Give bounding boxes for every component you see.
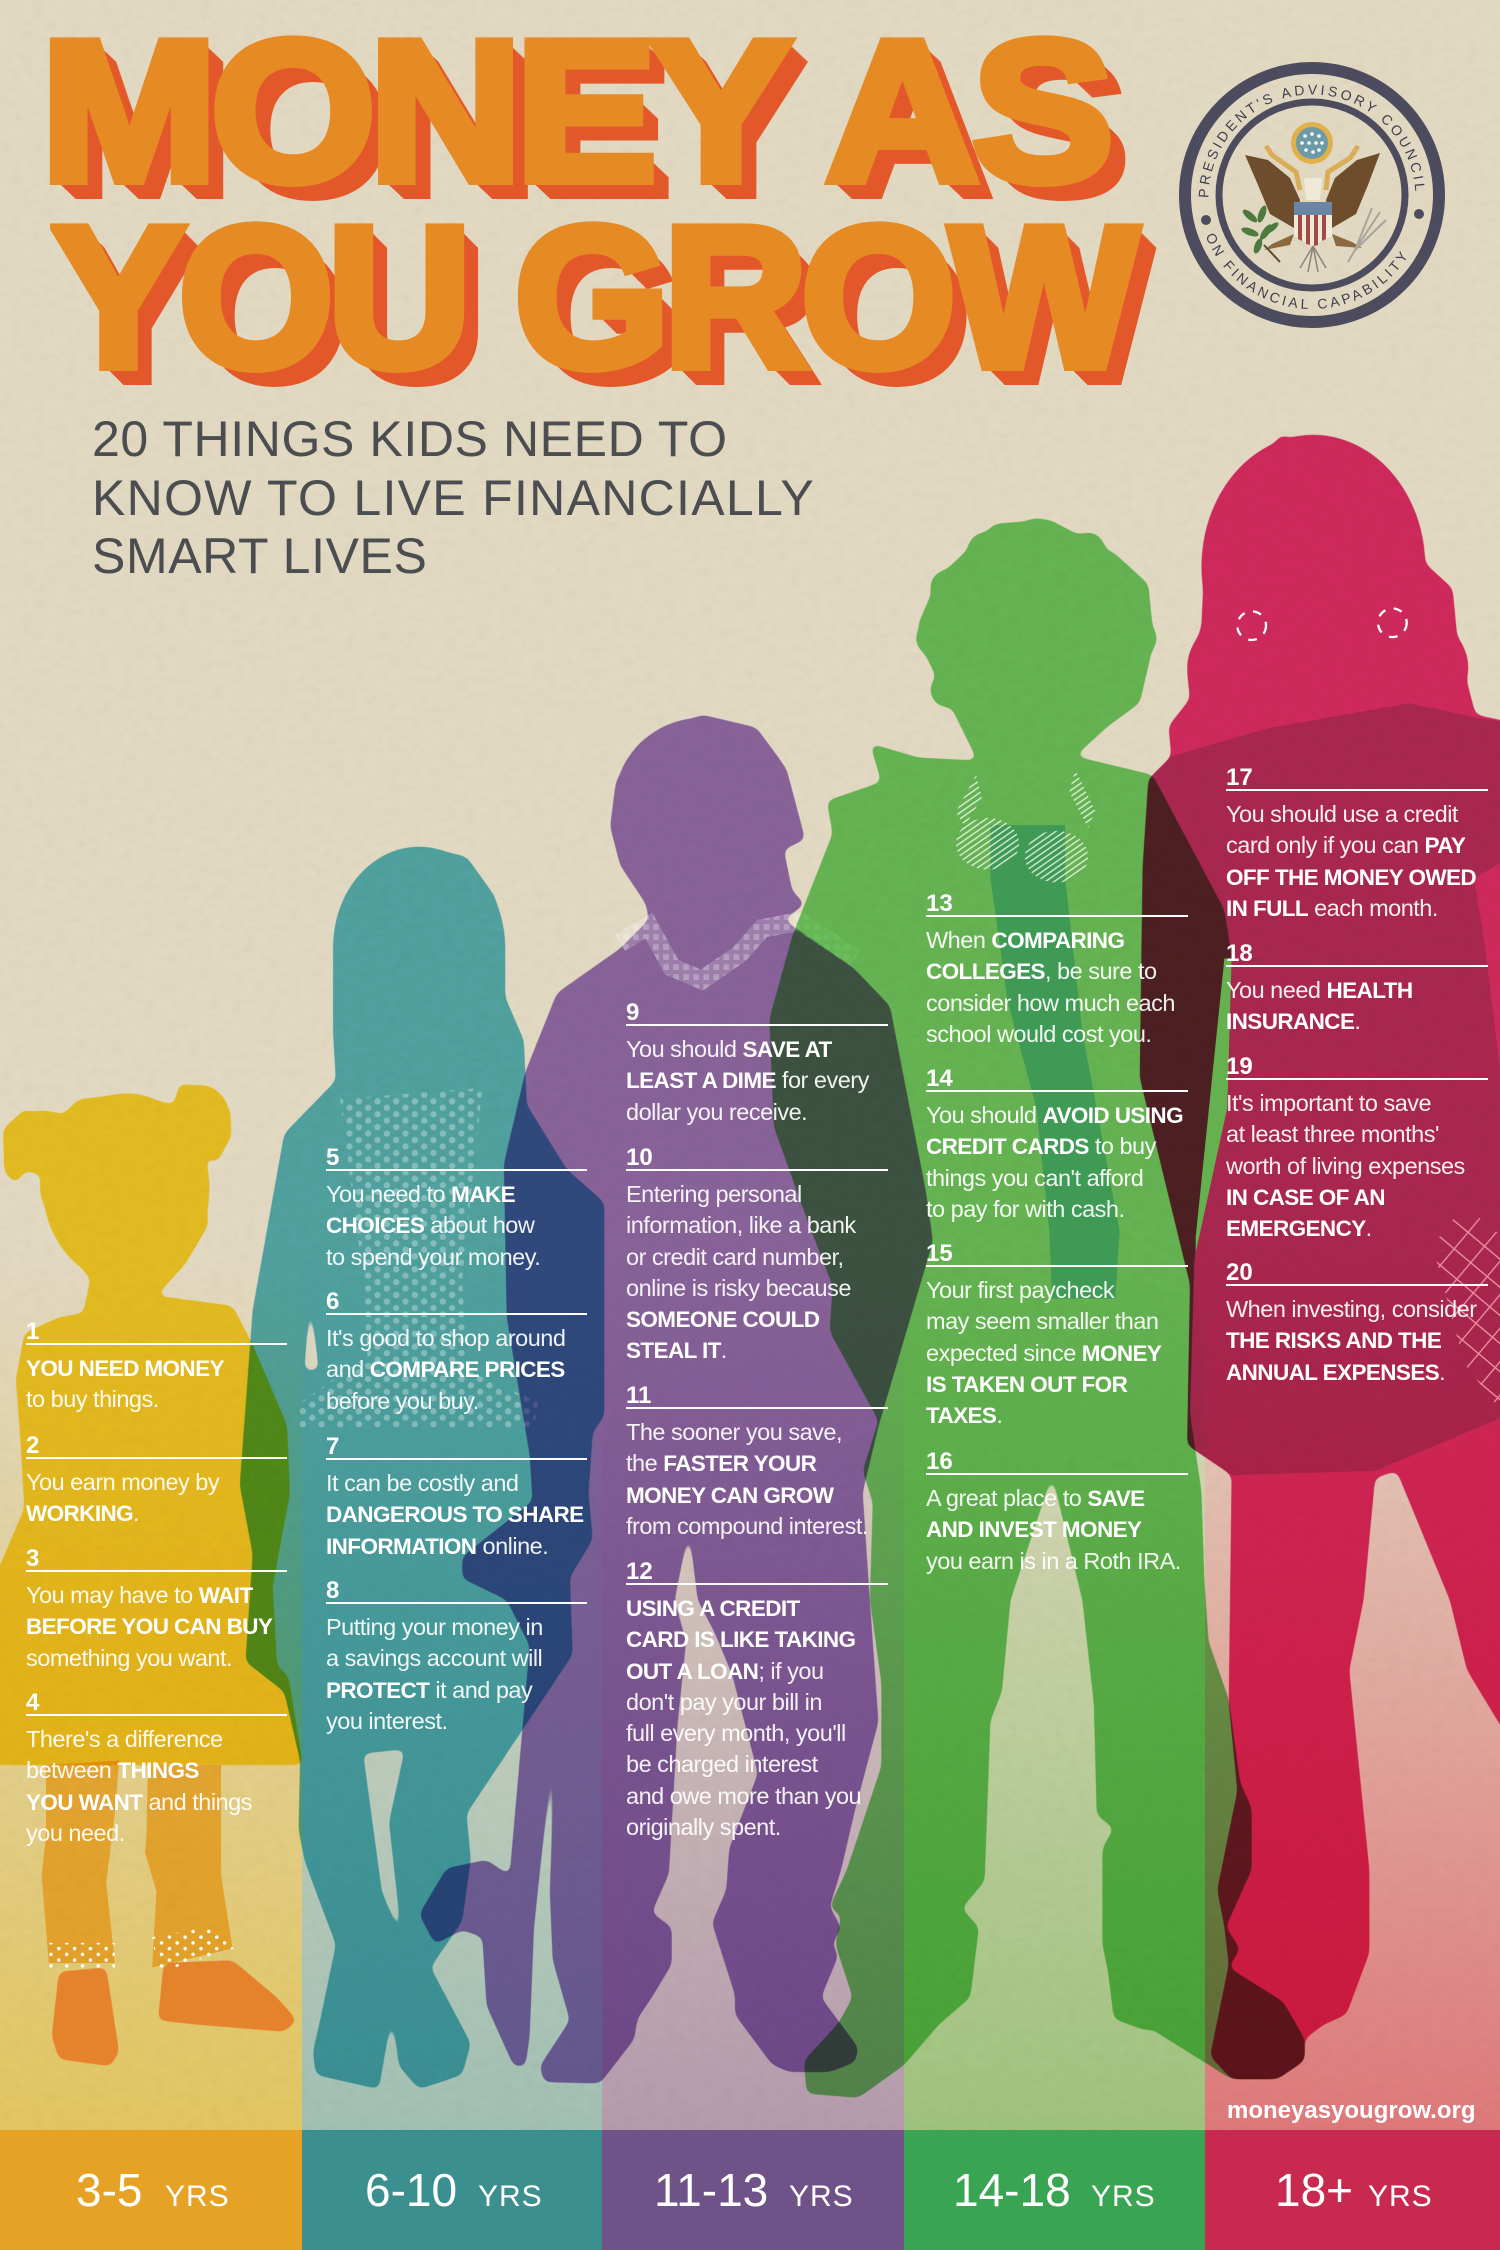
age band: 18+: 18+ — [1275, 2164, 1353, 2216]
tip 17: You should use a credit — [1226, 801, 1458, 827]
seal: President's Advisory Council on Financial Capability: PRESIDENT'S ADVISORY COUNCIL — [1198, 84, 1424, 197]
tip 3: BEFORE YOU CAN BUY — [26, 1614, 272, 1639]
tip 6 — [326, 1313, 587, 1417]
title: MONEY AS — [41, 0, 1107, 223]
tip 17: IN FULL each month. — [1226, 895, 1438, 921]
tip 13: consider how much each — [926, 990, 1175, 1016]
tip 20: When investing, consider — [1226, 1296, 1477, 1322]
items for ages 3-5: 3 — [26, 1545, 39, 1572]
subtitle: SMART LIVES — [92, 528, 427, 584]
items for ages 6-10: 8 — [326, 1577, 339, 1604]
tip 4: between THINGS — [26, 1757, 199, 1783]
tip 8 — [326, 1602, 587, 1737]
tip 17: OFF THE MONEY OWED — [1226, 865, 1476, 890]
items for ages 14-18: 16 — [926, 1448, 953, 1475]
tip 19: at least three months' — [1226, 1121, 1439, 1147]
tip 7: It can be costly and — [326, 1470, 518, 1496]
tip 10 — [626, 1169, 888, 1367]
tip 20: THE RISKS AND THE — [1226, 1328, 1441, 1353]
tip 8: a savings account will — [326, 1645, 542, 1671]
tip 20: ANNUAL EXPENSES. — [1226, 1359, 1445, 1385]
tip 19: EMERGENCY. — [1226, 1215, 1372, 1241]
tip 15: IS TAKEN OUT FOR — [926, 1372, 1127, 1397]
tip 17 — [1226, 789, 1488, 924]
items for ages 18+: 18 — [1226, 940, 1253, 967]
collar check pattern — [620, 921, 856, 980]
tip 9: You should SAVE AT — [626, 1036, 832, 1062]
tip 6: It's good to shop around — [326, 1325, 565, 1351]
subtitle: KNOW TO LIVE FINANCIALLY — [92, 470, 815, 526]
tip 3: You may have to WAIT — [26, 1582, 253, 1608]
items for ages 14-18: 13 — [926, 890, 953, 917]
tip 13: When COMPARING — [926, 927, 1124, 953]
tip 16: AND INVEST MONEY — [926, 1517, 1141, 1542]
tip 10: STEAL IT. — [626, 1337, 727, 1363]
tip 15 — [926, 1265, 1188, 1431]
tip 5: You need to MAKE — [326, 1181, 515, 1207]
age band: 14-18 — [904, 2130, 1205, 2250]
tip 14 — [926, 1090, 1188, 1225]
age band: 14-18: YRS — [1091, 2180, 1156, 2213]
title: YOU GROW — [52, 186, 1132, 409]
items for ages 18+: 20 — [1226, 1259, 1253, 1286]
legs of age 3-5 girl — [42, 1761, 233, 1967]
tip 12 — [626, 1583, 888, 1843]
items for ages 11-13: 11 — [626, 1382, 651, 1409]
age band: 3-5: YRS — [165, 2180, 230, 2213]
tip 15: Your first paycheck — [926, 1277, 1114, 1303]
tip 10: Entering personal — [626, 1181, 802, 1207]
tip 12: don't pay your bill in — [626, 1689, 822, 1715]
silhouette: age 6-10 girl — [240, 847, 604, 2089]
items for ages 14-18 — [926, 890, 1188, 1574]
tip 1: YOU NEED MONEY — [26, 1356, 224, 1381]
tip 12: CARD IS LIKE TAKING — [626, 1627, 855, 1652]
gap between arm and dress — [1196, 959, 1232, 1253]
eagle — [1240, 122, 1386, 272]
tip 19 — [1226, 1078, 1488, 1244]
tip 4: you need. — [26, 1820, 125, 1846]
tip 12: USING A CREDIT — [626, 1596, 800, 1621]
tip 14: CREDIT CARDS to buy — [926, 1133, 1156, 1159]
items for ages 18+: 19 — [1226, 1053, 1253, 1080]
items for ages 14-18: 15 — [926, 1240, 953, 1267]
tip 13 — [926, 915, 1188, 1050]
tip 18: You need HEALTH — [1226, 977, 1412, 1003]
items for ages 11-13: 12 — [626, 1558, 653, 1585]
tip 11: from compound interest. — [626, 1513, 868, 1539]
tip 5 — [326, 1169, 587, 1273]
tip 13: COLLEGES, be sure to — [926, 958, 1157, 984]
tip 15: may seem smaller than — [926, 1308, 1158, 1334]
tip 2: You earn money by — [26, 1469, 219, 1495]
tip 7 — [326, 1458, 587, 1562]
tip 3: something you want. — [26, 1645, 232, 1671]
items for ages 3-5: 4 — [26, 1689, 39, 1716]
age band: 14-18: 14-18 — [953, 2164, 1071, 2216]
woman's dress — [1140, 703, 1500, 1475]
shoes of age 3-5 girl — [52, 1960, 297, 2066]
tip 1 — [26, 1343, 287, 1416]
silhouette: age 14-18 teen — [769, 518, 1305, 2098]
tip 9: dollar you receive. — [626, 1099, 807, 1125]
tip 11: The sooner you save, — [626, 1419, 842, 1445]
tip 9 — [626, 1024, 888, 1128]
dress grid pattern — [1433, 1205, 1500, 1413]
age band: 3-5 — [0, 2130, 302, 2250]
tip 4 — [26, 1714, 287, 1849]
tip 16 — [926, 1473, 1188, 1577]
age band: 18+: YRS — [1368, 2180, 1433, 2213]
tip 8: you interest. — [326, 1708, 448, 1734]
items for ages 3-5: 2 — [26, 1432, 39, 1459]
age band: 11-13 — [602, 2130, 904, 2250]
shirt polka dots — [297, 1088, 538, 1428]
tip 19: worth of living expenses — [1226, 1153, 1465, 1179]
age band: 18+ — [1205, 2130, 1500, 2250]
tip 14: You should AVOID USING — [926, 1102, 1183, 1128]
tip 8: Putting your money in — [326, 1614, 543, 1640]
silhouette: age 18+ woman — [1140, 435, 1500, 2079]
teen shirt and tie panel — [990, 825, 1120, 1299]
earrings — [1237, 608, 1407, 640]
silhouette: age 11-13 kid — [419, 715, 933, 2084]
tip 10: online is risky because — [626, 1275, 851, 1301]
tip 12: OUT A LOAN; if you — [626, 1658, 824, 1684]
items for ages 3-5 — [26, 1318, 287, 1846]
tip 10: SOMEONE COULD — [626, 1307, 819, 1332]
items for ages 11-13 — [626, 999, 888, 1840]
age band: 11-13: YRS — [789, 2180, 854, 2213]
seal: President's Advisory Council on Financial Capability: ON FINANCIAL CAPABILITY — [1207, 234, 1406, 309]
tip 4: YOU WANT and things — [26, 1789, 252, 1815]
tip 15: TAXES. — [926, 1402, 1002, 1428]
tip 16: you earn is in a Roth IRA. — [926, 1548, 1181, 1574]
tip 12: be charged interest — [626, 1751, 818, 1777]
items for ages 18+: 17 — [1226, 764, 1253, 791]
items for ages 6-10 — [326, 1144, 587, 1734]
subtitle: 20 THINGS KIDS NEED TO — [92, 411, 728, 467]
items for ages 11-13: 10 — [626, 1144, 653, 1171]
silhouette: age 3-5 girl — [0, 1083, 303, 1765]
items for ages 14-18: 14 — [926, 1065, 953, 1092]
headphones hatch — [956, 769, 1095, 882]
tip 10: information, like a bank — [626, 1212, 856, 1238]
tip 17: card only if you can PAY — [1226, 832, 1465, 858]
tip 5: CHOICES about how — [326, 1212, 534, 1238]
items for ages 6-10: 5 — [326, 1144, 339, 1171]
items for ages 6-10: 7 — [326, 1433, 339, 1460]
tip 3 — [26, 1570, 287, 1674]
tip 12: originally spent. — [626, 1814, 781, 1840]
tip 10: or credit card number, — [626, 1244, 844, 1270]
tip 6: before you buy. — [326, 1388, 479, 1414]
tip 1: to buy things. — [26, 1386, 159, 1412]
age band: 6-10: 6-10 — [365, 2164, 457, 2216]
tip 7: INFORMATION online. — [326, 1533, 548, 1559]
tip 16: A great place to SAVE — [926, 1485, 1145, 1511]
age band: 6-10: YRS — [478, 2180, 543, 2213]
tip 8: PROTECT it and pay — [326, 1677, 532, 1703]
sock ruffles with dots — [47, 1927, 234, 1973]
tip 19: It's important to save — [1226, 1090, 1431, 1116]
subtitle — [92, 411, 815, 584]
tip 14: to pay for with cash. — [926, 1196, 1124, 1222]
tip 11 — [626, 1407, 888, 1542]
age band: 6-10 — [302, 2130, 602, 2250]
tip 12: and owe more than you — [626, 1783, 861, 1809]
items for ages 6-10: 6 — [326, 1288, 339, 1315]
tip 11: MONEY CAN GROW — [626, 1483, 833, 1508]
tip 14: things you can't afford — [926, 1165, 1143, 1191]
items for ages 11-13: 9 — [626, 999, 639, 1026]
age band: 11-13: 11-13 — [654, 2164, 768, 2216]
items for ages 3-5: 1 — [26, 1318, 39, 1345]
tip 7: DANGEROUS TO SHARE — [326, 1502, 584, 1527]
tip 12: full every month, you'll — [626, 1720, 846, 1746]
tip 15: expected since MONEY — [926, 1340, 1161, 1366]
items for ages 18+ — [1226, 764, 1488, 1385]
title — [41, 0, 1156, 409]
tip 5: to spend your money. — [326, 1244, 540, 1270]
tip 4: There's a difference — [26, 1726, 223, 1752]
tip 11: the FASTER YOUR — [626, 1450, 816, 1476]
tip 20 — [1226, 1284, 1488, 1388]
website address: moneyasyougrow.org — [1227, 2097, 1475, 2124]
tip 19: IN CASE OF AN — [1226, 1185, 1385, 1210]
tip 2 — [26, 1457, 287, 1530]
tip 9: LEAST A DIME for every — [626, 1067, 869, 1093]
tip 18 — [1226, 965, 1488, 1038]
tip 6: and COMPARE PRICES — [326, 1356, 565, 1382]
tip 18: INSURANCE. — [1226, 1008, 1360, 1034]
tip 13: school would cost you. — [926, 1021, 1151, 1047]
tip 2: WORKING. — [26, 1500, 139, 1526]
age band: 3-5: 3-5 — [76, 2164, 142, 2216]
